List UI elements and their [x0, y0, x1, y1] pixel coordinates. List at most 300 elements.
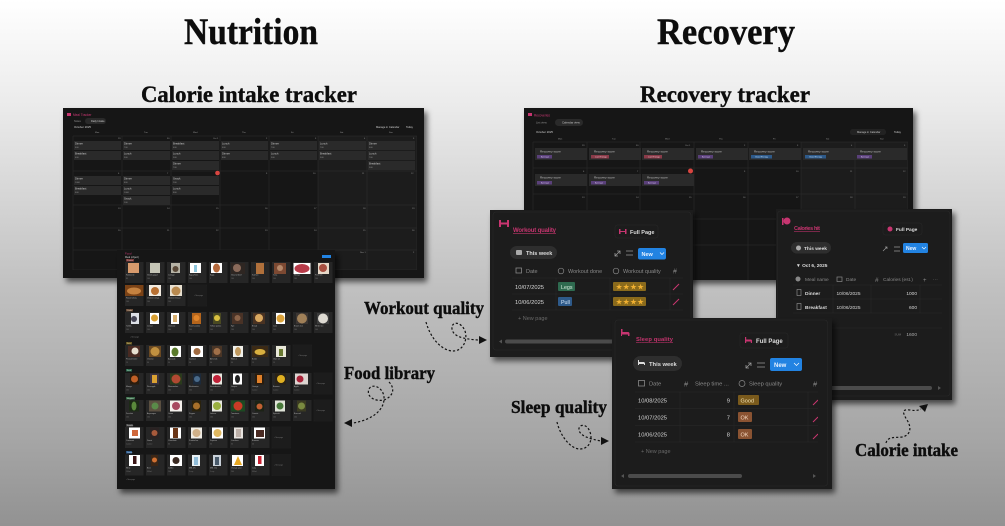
table header: Meal name — [805, 277, 829, 283]
recovery toolbar: Today — [894, 130, 902, 134]
section: protein: 100 — [252, 278, 255, 280]
section: carbs: Tortilla — [126, 324, 132, 328]
heading: Recovery: Recovery — [657, 12, 795, 53]
recovery day numbers — [582, 144, 906, 199]
meal entries: 100 — [124, 202, 128, 204]
meal entries: Lunch — [173, 152, 181, 156]
weekday headers: Thu — [242, 132, 247, 134]
section: drinks: 150ml — [126, 471, 131, 473]
section: carbs: 100 — [273, 329, 276, 331]
recovery weekday headers: Sun — [880, 138, 885, 140]
row: 10/06/2025: ★★★★ — [616, 298, 644, 306]
meal entries: Dinner — [75, 142, 83, 146]
recovery weekday headers: Mon — [558, 138, 563, 140]
meal entries: 200 — [173, 182, 177, 184]
recovery weekday headers: Sat — [826, 138, 830, 140]
icon: cutlery — [782, 218, 790, 225]
section: protein: Rotisserie — [126, 274, 134, 276]
recovery score cards: Good Energy — [809, 156, 823, 159]
panel: sleep quality — [612, 318, 832, 489]
section: fats: Olive oil — [273, 358, 280, 360]
full page button: Full Page — [630, 230, 654, 236]
calendar day numbers: 9 — [266, 173, 268, 175]
arrow: to calories panel — [886, 404, 928, 443]
section: carbs: 100 — [252, 329, 255, 331]
recovery score cards: Average — [648, 182, 657, 185]
row: Dinner: 1000 — [906, 291, 917, 297]
calendar title: Meal Tracker — [73, 113, 92, 117]
section: vegetables: 100 — [252, 416, 255, 418]
meal entries: 700 — [124, 147, 128, 149]
table header — [516, 268, 677, 276]
recovery score cards: Average — [702, 156, 711, 159]
calendar toolbar: Today — [406, 125, 414, 129]
section: protein: 100 — [168, 301, 171, 303]
section: fruit: Watermelon — [168, 385, 178, 388]
section: drinks: 330ml — [147, 471, 152, 473]
meal entries: Lunch — [320, 142, 328, 146]
recovery score cards: Average — [541, 182, 550, 185]
table header: Sleep time ... — [695, 382, 729, 388]
recovery score cards: Recovery score — [540, 150, 561, 154]
section: protein: 85 — [126, 278, 128, 280]
section: protein: Pork loin — [315, 274, 322, 276]
section: drinks: + New page — [274, 464, 283, 466]
row: Breakfast: Breakfast — [805, 305, 827, 311]
section: carbs: 100 — [210, 329, 213, 331]
section: carbs: 100 — [147, 329, 150, 331]
row: Dinner — [797, 290, 917, 297]
calendar day numbers: 24 — [314, 230, 317, 232]
section: protein: Ribeye — [294, 274, 300, 276]
calendar toolbar: Manage in Calendar — [376, 125, 399, 129]
food library header: Food — [125, 252, 132, 256]
recovery day numbers: 13 — [582, 197, 585, 199]
section: fats: + New page — [298, 355, 307, 357]
new button: New — [774, 363, 787, 369]
section: snacks: Brownie — [252, 439, 259, 442]
section: fats: 30 — [147, 362, 149, 364]
icon: recovery — [528, 113, 532, 116]
row: 10/07/2025: ★★★★ — [616, 282, 644, 292]
section: drinks: 1 cup — [189, 471, 193, 473]
section: snacks — [125, 424, 290, 448]
section: drinks: Milk 2% — [189, 468, 196, 470]
meal entries: Breakfast — [173, 142, 185, 146]
row: 10/08/2025: Good — [740, 398, 754, 404]
sleep title link: Sleep quality — [636, 337, 674, 343]
sum row — [894, 332, 917, 338]
arrow: to food library — [344, 382, 393, 427]
meal entries: 800 — [124, 182, 128, 184]
section: fats: 50 — [168, 362, 170, 364]
meal entries: Breakfast — [369, 162, 381, 166]
calendar day numbers: 16 — [265, 208, 268, 210]
calendar view tabs: Daily Intake — [91, 119, 105, 123]
section: vegetables: 100 — [294, 416, 297, 418]
section: fruit: 100 — [189, 390, 192, 392]
section: fruit: Mango — [126, 386, 132, 388]
calendar grid lines — [73, 136, 417, 270]
section: vegetables: 100 — [126, 416, 129, 418]
section: drinks: 200 — [168, 471, 171, 473]
recovery score cards — [535, 148, 907, 186]
row: Breakfast: 10/06/2025 — [836, 305, 861, 311]
section: carbs: White rice — [315, 324, 323, 328]
recovery score cards: Recovery score — [860, 150, 881, 154]
recovery score cards: Recovery score — [540, 176, 561, 180]
weekday headers: Sun — [389, 132, 394, 134]
section: protein: Protein — [127, 259, 133, 262]
meal entries: Dinner — [222, 152, 230, 156]
section: protein: 100 — [273, 278, 276, 280]
section: fruit: + New page — [316, 383, 325, 385]
section: protein: Chicken wings — [147, 298, 159, 300]
food library header: Meal (object) — [125, 256, 139, 259]
recovery score cards: Low Energy — [595, 156, 607, 159]
meal entries: 600 — [222, 147, 226, 149]
callout: Calorie intake: Calorie intake — [855, 440, 958, 460]
section: snacks: 1 piece — [147, 444, 153, 446]
calendar day numbers: 27 — [118, 252, 121, 254]
recovery view tabs: List view — [536, 120, 548, 124]
section: carbs: 100 — [231, 329, 234, 331]
table header — [638, 380, 818, 388]
calendar day numbers: 2 — [413, 252, 415, 254]
table toolbar icons — [746, 363, 765, 368]
section: vegetables: Lettuce — [210, 412, 216, 415]
this week tab — [791, 242, 831, 254]
row: Breakfast — [797, 304, 917, 311]
section: fats — [125, 342, 312, 366]
section: drinks: Wine — [126, 468, 130, 470]
recovery day numbers: 14 — [636, 197, 639, 199]
section: fats: Almonds — [210, 358, 217, 360]
section: fruit — [125, 369, 332, 394]
meal entries: 600 — [369, 147, 373, 149]
section: protein: 100 — [315, 278, 318, 280]
table header: Workout done — [568, 269, 602, 275]
table header: # — [813, 380, 818, 388]
meal entries: 500 — [369, 167, 373, 169]
callout: Workout quality: Workout quality — [364, 298, 484, 318]
recovery month label: October 2025 — [536, 130, 553, 134]
meal entries: 500 — [271, 157, 275, 159]
calendar day numbers: 7 — [167, 173, 169, 175]
new button: New — [906, 246, 916, 252]
calendar day numbers: 11 — [362, 173, 365, 175]
section: protein — [125, 259, 332, 306]
recovery score cards: Recovery score — [647, 176, 668, 180]
table header: # — [684, 380, 689, 388]
this week tab: This week — [526, 251, 553, 257]
meal entries: Snack — [124, 196, 132, 200]
recovery weekday headers: Fri — [773, 138, 776, 140]
recovery day numbers: 7 — [637, 171, 639, 173]
section: fruit: 100 — [231, 390, 234, 392]
section: vegetables: 100 — [231, 416, 234, 418]
row: 10/06/2025: 10/06/2025 — [638, 432, 667, 438]
meal entries: 400 — [173, 147, 177, 149]
recovery score cards: Recovery score — [594, 150, 615, 154]
section: fats: Cashew — [189, 358, 196, 360]
calendar day numbers: 30 — [167, 138, 170, 140]
row: 10/07/2025 — [638, 412, 818, 422]
section: protein: Chicken breast — [168, 296, 181, 300]
section: carbs: Brown rice — [294, 324, 303, 328]
section: snacks: + New page — [274, 437, 283, 439]
recovery grid lines — [533, 142, 908, 280]
section: carbs: Yellow potato — [210, 324, 221, 328]
meal entries: Lunch — [124, 186, 132, 190]
recovery weekday headers: Wed — [665, 138, 670, 140]
calendar day numbers: 23 — [265, 230, 268, 232]
recovery day numbers: 10 — [796, 171, 799, 173]
section: protein: 100 — [126, 301, 129, 303]
section: fats: Peanut butter — [126, 358, 138, 360]
recovery score cards: Recovery score — [647, 150, 668, 154]
recovery day numbers: 4 — [851, 145, 853, 147]
calendar day numbers: 6 — [118, 173, 120, 175]
section: protein: 100 — [189, 278, 192, 280]
section: fruit: Blueberries — [189, 385, 199, 388]
weekday headers: Sat — [340, 131, 344, 134]
new button: New — [642, 252, 654, 258]
section: vegetables: Spinach — [273, 413, 280, 415]
callout: Sleep quality: Sleep quality — [511, 397, 607, 417]
recovery day numbers: 5 — [904, 145, 906, 147]
table header: # — [673, 268, 677, 276]
this week tab — [510, 246, 557, 259]
row: 10/08/2025: 10/08/2025 — [638, 398, 667, 404]
meal entries: Dinner — [124, 142, 132, 146]
meal entries: 400 — [75, 157, 79, 159]
section: vegetables: Zucchini — [126, 413, 134, 415]
row: 10/07/2025: Legs — [561, 285, 573, 291]
section: carbs: Sweet potato — [189, 324, 200, 328]
table header: Sleep quality — [749, 382, 782, 388]
section: carbs: 100 — [315, 329, 318, 331]
meal entries: Lunch — [173, 186, 181, 190]
section: fruit: 1 piece — [294, 390, 300, 392]
row: Dinner: 10/06/2025 — [836, 291, 861, 297]
section: vegetables: 100 — [273, 416, 276, 418]
section: drinks: 330ml — [252, 471, 257, 473]
section: drinks: Drinks — [127, 451, 132, 454]
row: 10/06/2025: OK — [740, 432, 749, 438]
section: fats: Cheese — [147, 358, 154, 360]
section: protein: 100 — [147, 301, 150, 303]
section: fats: 30 — [210, 362, 212, 364]
calendar day numbers: 26 — [412, 230, 415, 232]
new button — [903, 243, 928, 253]
section: protein: + New page — [194, 295, 203, 297]
icon: meal tracker — [67, 113, 71, 116]
calendar day numbers: 21 — [167, 230, 170, 232]
section: fats: 30 — [231, 362, 233, 364]
section: carbs: Carbs — [127, 309, 132, 312]
callout: Food library: Food library — [344, 363, 435, 383]
section: vegetables: 100 — [189, 416, 192, 418]
section: protein: Greek yogurt — [147, 274, 158, 276]
section: snacks: 30 — [168, 444, 170, 446]
table toolbar icons — [615, 251, 633, 256]
weekend shading — [318, 136, 417, 270]
section: drinks: 200 — [231, 471, 234, 473]
row: 10/07/2025: 7 — [727, 416, 730, 422]
calendar day numbers: 12 — [411, 173, 414, 175]
section: fats: 30 — [189, 362, 191, 364]
section: protein: Ground beef — [231, 274, 242, 276]
table header: ··· — [933, 278, 938, 283]
calories title link: Calories hit — [794, 226, 820, 232]
row: 10/06/2025 — [515, 297, 679, 306]
section: carbs: Cereal — [147, 324, 153, 328]
panel: food library — [117, 250, 335, 489]
scrollbar — [499, 340, 630, 344]
section: carbs: Rye — [231, 326, 234, 328]
section: fats: 15 — [126, 362, 128, 364]
arrow: to workout panel — [426, 322, 487, 351]
calendar day numbers: 13 — [118, 208, 121, 210]
section: vegetables: Tomatoes — [231, 412, 239, 415]
new page row: + New page — [641, 449, 671, 455]
section: protein: 1 — [210, 278, 211, 280]
new button — [638, 248, 666, 260]
section: carbs: 100 — [168, 329, 171, 331]
recovery weekday headers: Thu — [719, 138, 724, 140]
section: carbs: Bread — [252, 324, 257, 328]
recovery day numbers: 18 — [850, 197, 853, 199]
section: snacks: 60 — [189, 444, 191, 446]
section: vegetables: 100 — [210, 416, 213, 418]
calendar toolbar — [376, 125, 414, 129]
section: drinks: Coffee — [168, 468, 174, 470]
full page button — [615, 225, 658, 238]
section: vegetables: + New page — [316, 410, 325, 412]
meal entries: 500 — [173, 157, 177, 159]
meal entries: Dinner — [369, 142, 377, 146]
meal entries: Lunch — [124, 152, 132, 156]
scrollbar — [621, 474, 816, 478]
workout title link: Workout quality — [513, 228, 557, 234]
calendar day numbers: 25 — [363, 230, 366, 232]
recovery score cards: Average — [541, 156, 550, 159]
recovery score cards: Average — [595, 182, 604, 185]
subheading: Calorie intake tracker: Calorie intake tracker — [141, 82, 357, 107]
section: snacks: Popcorn — [210, 439, 217, 442]
meal entries: 700 — [173, 167, 177, 169]
heading: Nutrition: Nutrition — [184, 12, 318, 53]
calendar day numbers: Nov 1 — [360, 252, 366, 254]
meal entries: 1000 — [124, 192, 130, 194]
section: snacks: Croissant — [126, 439, 134, 442]
section: protein: Roast turkey — [126, 296, 137, 300]
calendar day numbers: 19 — [412, 208, 415, 210]
table header: Date — [649, 382, 661, 388]
section: drinks — [125, 451, 290, 481]
row: 10/08/2025 — [638, 395, 818, 405]
table toolbar icons — [883, 247, 900, 251]
recovery weekday headers: Tue — [612, 138, 616, 140]
recovery title: Recoveries — [534, 114, 550, 118]
section: drinks: 1 cup — [210, 471, 214, 473]
section: protein: Cottage — [168, 274, 175, 276]
section: protein: Tuna — [273, 274, 278, 276]
panel: recovery calendar — [524, 108, 913, 280]
section: carbs: 100 — [126, 329, 129, 331]
calendar view tabs — [74, 118, 106, 124]
section: fats: 15 — [273, 362, 275, 364]
section: snacks: Protein bar — [189, 439, 199, 442]
sum row: SUM — [894, 332, 902, 336]
new page row: + New page — [518, 316, 548, 322]
table header: Date — [846, 277, 856, 283]
section: drinks: + New page — [126, 479, 135, 481]
icon: dumbbell — [499, 220, 509, 227]
recovery day numbers: Oct 1 — [685, 144, 691, 147]
row: 10/07/2025: 10/07/2025 — [515, 285, 544, 291]
section: vegetables: Veggies — [127, 398, 134, 400]
recovery day numbers: 9 — [744, 171, 746, 173]
row: 10/07/2025 — [515, 282, 679, 292]
arrow: to sleep panel — [557, 422, 609, 449]
panel: workout quality — [490, 210, 693, 357]
calendar day numbers: 2 — [266, 138, 268, 140]
table header: Calories (est.) — [883, 277, 913, 283]
section: fruit: Strawberries — [210, 385, 221, 388]
section: vegetables: Asparagus — [147, 412, 156, 415]
section: protein: 100 — [231, 278, 234, 280]
recovery score cards: Recovery score — [808, 150, 829, 154]
calendar day numbers: 22 — [216, 230, 219, 232]
section: fats: 15 — [252, 362, 254, 364]
panel: calorie intake calendar — [63, 108, 424, 278]
meal entries: 500 — [124, 157, 128, 159]
section: drinks: Orange juice — [231, 466, 242, 470]
section: fruit: 100 — [168, 390, 171, 392]
recovery weekday headers — [558, 138, 885, 140]
row: Breakfast: 600 — [909, 305, 917, 311]
section: snacks: Chocolate — [168, 439, 177, 442]
meal entries: 500 — [320, 157, 324, 159]
section: fruit: 1 piece — [273, 390, 279, 392]
this week tab — [633, 356, 682, 371]
meal entries: 800 — [222, 157, 226, 159]
section: fruit: 1 piece — [252, 390, 258, 392]
meal entries: Dinner — [173, 162, 181, 166]
meal entries: 700 — [320, 147, 324, 149]
table header: + — [923, 278, 927, 284]
recovery score cards: Recovery score — [701, 150, 722, 154]
this week tab: This week — [649, 362, 677, 368]
recovery day numbers: 19 — [903, 197, 906, 199]
row: 10/06/2025: Pull — [561, 300, 570, 306]
subheading: Recovery tracker: Recovery tracker — [640, 82, 810, 107]
meal entries: Lunch — [222, 142, 230, 146]
section: vegetables: Carrots — [252, 412, 258, 415]
recovery day numbers: 6 — [583, 171, 585, 173]
section: vegetables: Broccoli — [294, 412, 301, 415]
weekday headers: Tue — [144, 132, 148, 134]
section: protein: Egg whites — [189, 274, 198, 276]
section: snacks: 50 — [252, 444, 254, 446]
calendar day numbers: 18 — [363, 208, 366, 210]
table rules — [512, 278, 683, 310]
section: protein: 100 — [294, 278, 297, 280]
calendar day numbers: 14 — [167, 208, 170, 210]
meal entries: Lunch — [271, 152, 279, 156]
